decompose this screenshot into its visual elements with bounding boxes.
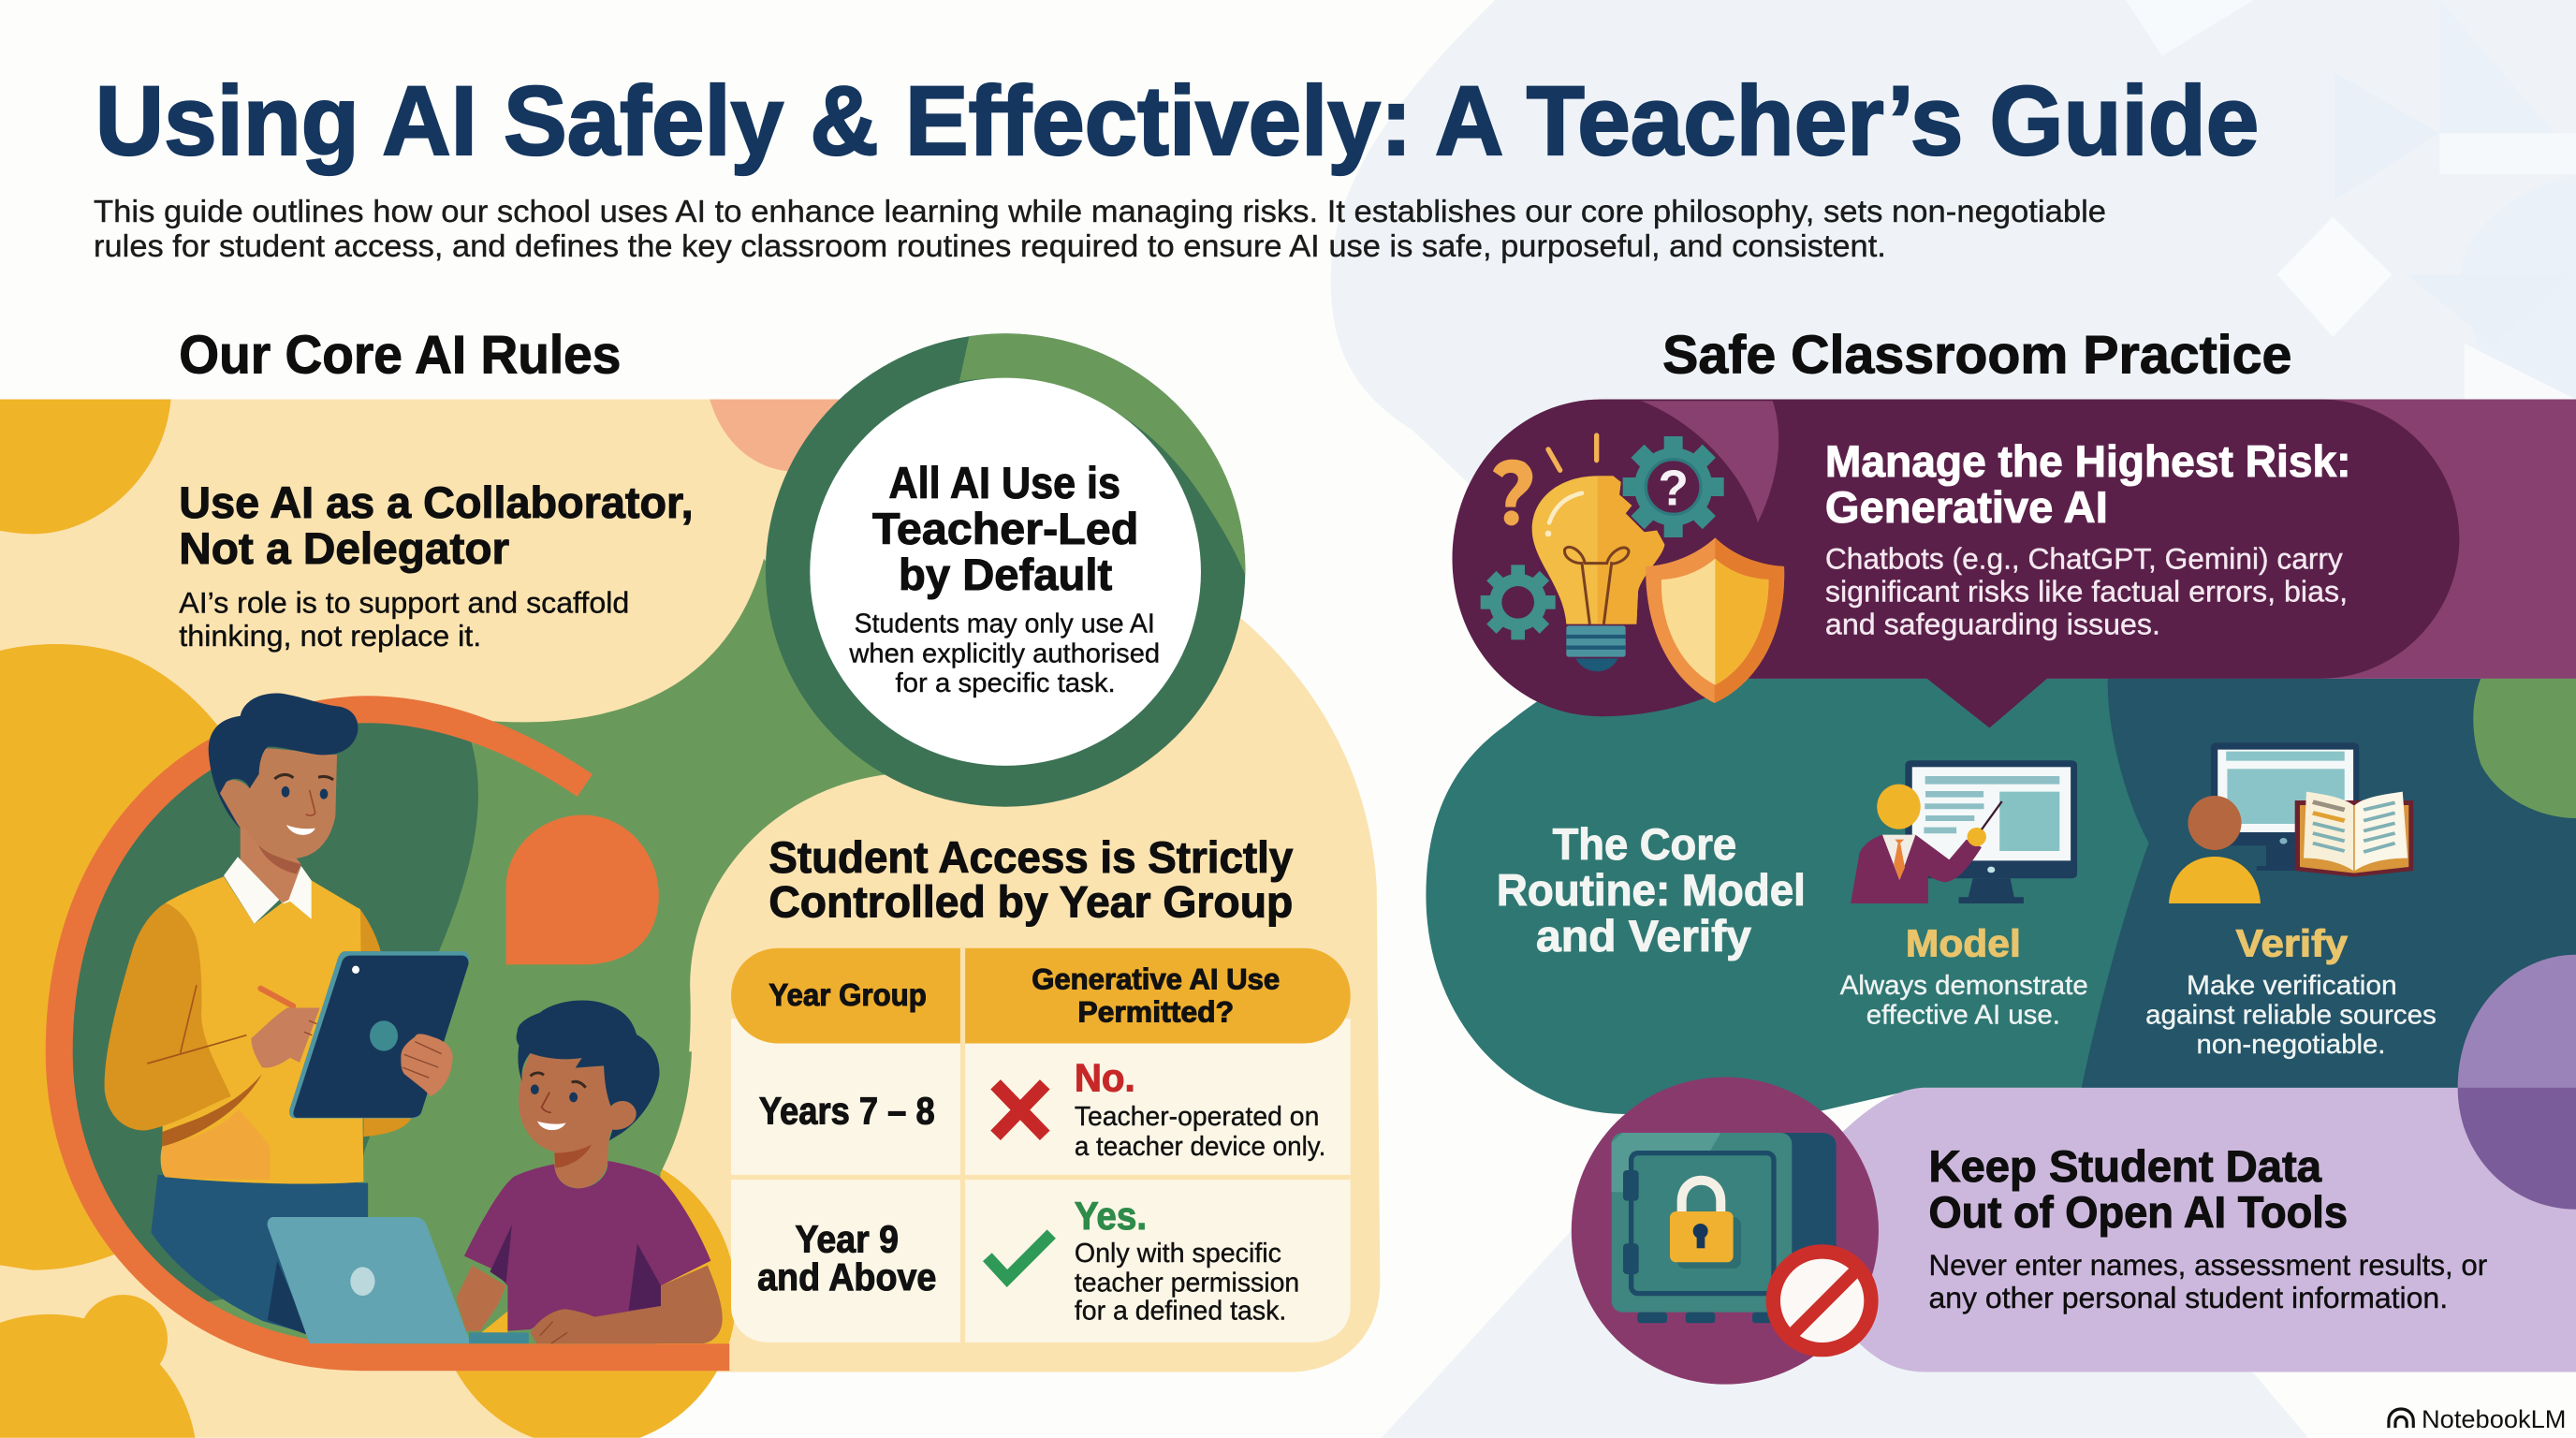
sleeve shadow <box>162 1074 262 1147</box>
yellow circle behind student <box>437 1149 736 1438</box>
verify text: Verify <box>2236 921 2349 964</box>
heading: safe classroom practice: Safe Classroom Practice <box>1662 325 2291 385</box>
panel: highest risk <box>1453 399 2576 728</box>
panel: rule 1 text <box>179 478 694 653</box>
circle text: when explicitly authorised <box>848 638 1160 668</box>
dark teal section <box>2082 679 2576 1088</box>
risk text <box>1825 437 2351 640</box>
model text: effective AI use. <box>1866 1000 2060 1030</box>
orange drop <box>506 815 659 964</box>
table rows background <box>731 1019 1351 1343</box>
bubble highlight <box>1641 401 1778 522</box>
routine heading <box>1497 820 1806 961</box>
icon: model presenter <box>1851 760 2077 903</box>
row: year 9 and above: Yes. <box>1075 1194 1147 1238</box>
panel: rule 1 text: Not a Delegator <box>179 524 509 574</box>
rays <box>1548 435 1597 470</box>
small yellow wedge <box>481 1312 507 1332</box>
panel: rule 1 text: Use AI as a Collaborator, <box>179 478 694 528</box>
intro text: rules for student access, and defines the key classroom routines required to ensure AI use is safe, purposeful, and consistent. <box>94 229 1886 264</box>
table header labels: Generative AI Use <box>1032 962 1280 996</box>
risk text: significant risks like factual errors, bias, <box>1825 574 2348 608</box>
verify text: non-negotiable. <box>2197 1030 2385 1060</box>
circle text: All AI Use is <box>889 459 1120 508</box>
verify text <box>2145 921 2437 1060</box>
green patch over yellow circle <box>368 1051 692 1345</box>
verify text: Make verification <box>2187 971 2397 1001</box>
row: year 9 and above: for a defined task. <box>1075 1296 1286 1326</box>
yellow circles <box>0 399 289 1438</box>
model text <box>1840 921 2088 1030</box>
table header labels: Year Group <box>768 978 927 1013</box>
risk text: Generative AI <box>1825 483 2108 533</box>
face <box>220 748 337 858</box>
student figure <box>268 1000 723 1343</box>
purple icon circle <box>1572 1077 1879 1385</box>
bulb <box>1532 476 1664 624</box>
routine heading: and Verify <box>1536 912 1752 961</box>
row: years 7-8: No. <box>1075 1055 1135 1099</box>
lilac corner circle lower <box>2458 1088 2576 1210</box>
question mark <box>1493 460 1532 507</box>
risk text: Manage the Highest Risk: <box>1825 437 2351 487</box>
row: year 9 and above <box>757 1194 1299 1326</box>
small gear <box>1481 565 1556 639</box>
tablet <box>289 951 469 1119</box>
left arm <box>456 1266 506 1331</box>
features <box>531 1084 539 1094</box>
table header <box>731 948 1351 1043</box>
row: years 7-8: Teacher-operated on <box>1075 1102 1319 1132</box>
intro text <box>94 195 2106 264</box>
background shapes <box>1331 0 2576 1438</box>
circle text: by Default <box>899 550 1112 600</box>
student access heading <box>768 833 1294 927</box>
row: year 9 and above: and Above <box>757 1255 936 1299</box>
data text <box>1928 1142 2487 1314</box>
data text: Out of Open AI Tools <box>1928 1188 2348 1238</box>
icon: lightbulb, gears and shield <box>1481 435 1784 703</box>
right arm <box>531 1266 723 1343</box>
pen <box>260 989 293 1006</box>
panel: core routine <box>1426 679 2576 1114</box>
pants shadow <box>268 1261 310 1336</box>
shirt <box>464 1161 710 1331</box>
data text: Keep Student Data <box>1928 1142 2322 1192</box>
panel: rule 1 text: thinking, not replace it. <box>179 619 481 653</box>
row: year 9 and above: Only with specific <box>1075 1239 1281 1269</box>
circle text <box>848 459 1160 698</box>
row: year 9 and above: teacher permission <box>1075 1269 1299 1299</box>
right sleeve <box>359 908 412 1137</box>
panel: teacher-led circle <box>766 320 1281 807</box>
lilac background <box>1823 1088 2576 1372</box>
teacher figure <box>105 693 469 1184</box>
hair <box>517 1000 659 1140</box>
intro text: This guide outlines how our school uses AI to enhance learning while managing risks. It establishes our core philosophy, sets non-negotiable <box>94 195 2106 229</box>
teacher legs <box>151 1175 368 1334</box>
right hand <box>401 1034 453 1096</box>
row: years 7-8: Years 7 – 8 <box>759 1089 935 1132</box>
title: Using AI Safely & Effectively: A Teacher’s Guide <box>95 66 2259 176</box>
green background blob <box>59 559 920 1347</box>
heading: our core AI rules: Our Core AI Rules <box>179 325 621 385</box>
sleeve <box>105 903 231 1130</box>
row: year 9 and above: Year 9 <box>795 1217 899 1260</box>
shield <box>1646 537 1784 703</box>
NotebookLM logo: NotebookLM <box>2422 1404 2566 1433</box>
sleeve folds <box>147 985 246 1064</box>
circle ring <box>766 333 1245 807</box>
routine heading: Routine: Model <box>1497 866 1806 916</box>
data text: Never enter names, assessment results, or <box>1928 1248 2487 1282</box>
risk text: Chatbots (e.g., ChatGPT, Gemini) carry <box>1825 541 2343 575</box>
icon: green check <box>988 1234 1051 1278</box>
peach circle <box>710 399 884 472</box>
student access heading: Student Access is Strictly <box>768 833 1294 883</box>
dark purple bubble <box>1453 399 2459 728</box>
panel: core AI rules <box>0 399 1380 1438</box>
risk text: and safeguarding issues. <box>1825 607 2160 640</box>
panel: student data <box>1572 955 2576 1385</box>
circle text: Students may only use AI <box>855 609 1155 639</box>
icon: verify with book <box>2169 742 2413 903</box>
teal blob <box>1426 679 2576 1114</box>
big gear <box>1623 436 1724 537</box>
routine heading: The Core <box>1553 820 1736 870</box>
circle text: for a specific task. <box>896 668 1116 698</box>
inner white circle <box>810 378 1201 766</box>
lilac corner circle <box>2458 955 2576 1088</box>
collar <box>224 857 312 924</box>
ring highlight <box>959 333 1245 575</box>
laptop <box>268 1217 471 1343</box>
panel: rule 1 text: AI’s role is to support and scaffold <box>179 586 629 620</box>
table header labels: Permitted? <box>1077 995 1234 1029</box>
verify text: against reliable sources <box>2145 1000 2437 1030</box>
face <box>519 1053 637 1188</box>
left hand <box>251 1007 320 1067</box>
cream panel background <box>0 399 855 1438</box>
bulb base <box>1566 625 1626 657</box>
icon: safe with lock <box>1612 1133 1837 1323</box>
model text: Always demonstrate <box>1840 971 2088 1001</box>
features <box>282 786 289 798</box>
sweater <box>161 876 363 1184</box>
orange ring <box>59 710 729 1357</box>
light purple band <box>1602 399 2576 679</box>
panel: student access <box>731 833 1351 1343</box>
hair <box>209 693 358 829</box>
sweater lower panel <box>161 1109 270 1180</box>
row: years 7-8: a teacher device only. <box>1075 1132 1325 1162</box>
icon: prohibition sign <box>1773 1252 1871 1350</box>
neck <box>241 826 301 903</box>
big gear: ? <box>1658 461 1689 516</box>
model text: Model <box>1906 921 2021 964</box>
table dividers <box>731 948 1351 1343</box>
circle text: Teacher-Led <box>872 505 1138 554</box>
row: years 7-8 <box>759 1055 1325 1162</box>
data text: any other personal student information. <box>1928 1281 2448 1314</box>
icon: red cross <box>996 1084 1045 1136</box>
cream right bubble <box>624 605 1380 1372</box>
student access heading: Controlled by Year Group <box>768 877 1293 927</box>
table header labels <box>768 962 1280 1029</box>
dark green inner shape <box>72 716 478 1306</box>
green corner circle <box>2473 679 2576 818</box>
